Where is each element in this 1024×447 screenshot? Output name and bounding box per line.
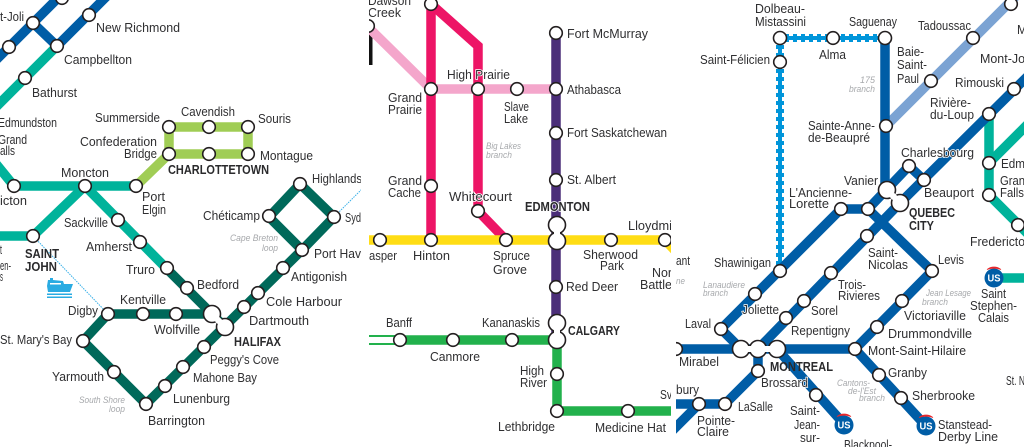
labels: Quebec: Derby Line bbox=[938, 430, 998, 444]
labels: Atlantic: en- bbox=[0, 259, 11, 273]
labels: Quebec: Saguenay bbox=[849, 15, 898, 29]
pink lines bbox=[431, 0, 506, 240]
labels: Atlantic: Montague bbox=[260, 149, 313, 163]
labels: Quebec: Victoriaville bbox=[904, 309, 966, 323]
labels: Quebec: Sherbrooke bbox=[912, 389, 975, 403]
double green end bbox=[369, 335, 395, 345]
branch notes: Quebec: 175 bbox=[860, 75, 876, 86]
Quebec and Montreal interchange fills bbox=[741, 190, 900, 349]
dotted Saguenay line bbox=[780, 38, 885, 270]
labels: Quebec: Dolbeau- bbox=[755, 2, 805, 16]
marker: Blackpool: US bbox=[838, 420, 851, 432]
labels: Quebec: Charlesbourg bbox=[901, 146, 974, 160]
blue network lines bbox=[670, 38, 1024, 433]
labels: Quebec: Stanstead- bbox=[938, 418, 992, 432]
marker: Saint Stephen bbox=[984, 267, 1004, 288]
branch note: Big Lakes: branch bbox=[486, 150, 512, 161]
labels: Atlantic: Syd bbox=[345, 211, 361, 225]
labels: Quebec: Saint-Félicien bbox=[700, 53, 770, 67]
labels: Atlantic: Bridge bbox=[124, 147, 157, 161]
labels: Quebec: Paul bbox=[897, 72, 919, 86]
labels: Quebec: Sorel bbox=[811, 304, 838, 318]
labels: Alberta: Prairie bbox=[388, 103, 422, 117]
labels: Alberta: Sherwood bbox=[583, 248, 638, 262]
labels: Atlantic: Cole Harbour bbox=[266, 295, 342, 309]
labels: Atlantic: alls bbox=[0, 144, 15, 158]
labels: Quebec: Rivieres bbox=[838, 289, 880, 303]
city labels: Quebec: CITY bbox=[909, 219, 935, 233]
dark green Nova Scotia loops bbox=[83, 184, 334, 404]
labels: Atlantic: s bbox=[0, 270, 3, 284]
labels: Alberta: Park bbox=[600, 259, 625, 273]
branch note: Big Lakes: Big Lakes bbox=[486, 141, 521, 152]
labels: Quebec: Mont-Saint-Hilaire bbox=[868, 344, 966, 358]
labels: Atlantic: Lunenburg bbox=[173, 392, 230, 406]
branch notes: Quebec bbox=[676, 75, 971, 404]
labels: Quebec: Rivière- bbox=[930, 96, 971, 110]
city labels: Alberta bbox=[525, 200, 621, 338]
labels: Atlantic: Sackville bbox=[64, 216, 108, 230]
labels: Quebec: du-Loup bbox=[930, 108, 974, 122]
branch notes: Quebec: branch bbox=[859, 393, 885, 404]
labels: Quebec: Laval bbox=[685, 317, 711, 331]
labels: Atlantic: Barrington bbox=[148, 414, 205, 428]
labels: Alberta: Banff bbox=[386, 316, 412, 330]
labels: Atlantic: Summerside bbox=[95, 111, 160, 125]
labels: Alberta bbox=[368, 0, 673, 435]
labels: Alberta: Grove bbox=[493, 263, 527, 277]
Edmonton and Calgary interchange fills bbox=[554, 232, 560, 333]
city labels: Atlantic: HALIFAX bbox=[234, 335, 282, 349]
green PEI loop bbox=[136, 127, 248, 186]
labels: Quebec bbox=[676, 2, 1024, 447]
labels: Quebec: Drummondville bbox=[888, 327, 972, 341]
ferry routes bbox=[33, 186, 365, 314]
labels: Atlantic: t bbox=[0, 243, 2, 257]
labels: Quebec: Levis bbox=[938, 253, 964, 267]
labels: Alberta: Cache bbox=[388, 186, 421, 200]
pale blue line bbox=[886, 0, 1024, 126]
labels: Alberta: Grand bbox=[388, 91, 422, 105]
branch notes: Quebec: Cantons- bbox=[837, 378, 870, 389]
branch notes: Quebec: branch bbox=[849, 84, 875, 95]
labels: Quebec: sur- bbox=[800, 431, 820, 445]
labels: Quebec: Saint bbox=[981, 287, 1006, 301]
labels: Alberta: Lake bbox=[504, 112, 528, 126]
labels: Quebec: Mirabel bbox=[679, 355, 719, 369]
labels: Alberta: Creek bbox=[368, 6, 402, 20]
icon: ferry bbox=[47, 278, 73, 298]
labels: Atlantic: Peggy's Cove bbox=[210, 353, 279, 367]
city labels: Quebec: QUEBEC bbox=[909, 206, 955, 220]
stations: Quebec bbox=[670, 0, 1024, 410]
green line bbox=[400, 340, 690, 411]
labels: Alberta: Lloydmi bbox=[628, 219, 672, 233]
teal New Brunswick lines bbox=[989, 114, 1024, 278]
city labels: Atlantic: CHARLOTTETOWN bbox=[168, 163, 269, 177]
panel: Atlantic Canada network bbox=[0, 0, 365, 428]
stations: Alberta bbox=[362, 0, 671, 417]
labels: Atlantic: Truro bbox=[126, 263, 155, 277]
labels: Atlantic: icton bbox=[0, 194, 27, 208]
marker: Saint Stephen: US bbox=[988, 274, 1001, 284]
branch notes: Atlantic: loop bbox=[109, 404, 125, 415]
labels: Atlantic: Highlands bbox=[312, 172, 362, 186]
city labels: Atlantic bbox=[25, 163, 282, 349]
labels: Quebec: Lorette bbox=[789, 197, 829, 211]
branch notes: Atlantic: loop bbox=[262, 243, 278, 254]
city labels: Quebec bbox=[770, 206, 955, 374]
city labels: Atlantic: JOHN bbox=[25, 260, 57, 274]
purple line bbox=[551, 33, 561, 335]
labels: Alberta: High bbox=[520, 364, 544, 378]
branch notes: Quebec: de-l'Est bbox=[848, 386, 876, 397]
labels: Atlantic: Moncton bbox=[61, 166, 109, 180]
labels: Atlantic: Yarmouth bbox=[52, 370, 104, 384]
labels: Quebec: Jean- bbox=[794, 418, 820, 432]
labels: Quebec: Tadoussac bbox=[918, 19, 971, 33]
labels: Alberta: Grand bbox=[388, 174, 422, 188]
labels: Quebec: Sainte-Anne- bbox=[808, 119, 875, 133]
branch notes: Quebec: ne bbox=[676, 276, 685, 287]
labels: Quebec: Granby bbox=[888, 366, 928, 380]
labels: Atlantic: Dartmouth bbox=[249, 314, 309, 328]
labels: Quebec: Joliette bbox=[742, 303, 779, 317]
labels: Alberta: Nor bbox=[652, 266, 672, 280]
teal New Brunswick lines bbox=[0, 46, 167, 269]
labels: Quebec: Repentigny bbox=[791, 324, 851, 338]
labels: Alberta: Canmore bbox=[430, 350, 480, 364]
labels: Atlantic: Bedford bbox=[197, 278, 239, 292]
labels: Atlantic: Digby bbox=[68, 304, 99, 318]
marker: Stanstead bbox=[916, 415, 936, 436]
labels: Atlantic: Campbellton bbox=[64, 53, 132, 67]
labels: Quebec: Beauport bbox=[924, 186, 975, 200]
labels: Atlantic: Bathurst bbox=[32, 86, 77, 100]
labels: Atlantic bbox=[0, 10, 362, 428]
labels: Quebec: Saint- bbox=[868, 246, 898, 260]
branch notes: Quebec: branch bbox=[703, 288, 728, 299]
branch notes: Quebec: branch bbox=[922, 297, 948, 308]
labels: Quebec: Saint- bbox=[897, 58, 927, 72]
branch note: Big Lakes bbox=[486, 142, 521, 158]
city labels: Alberta: EDMONTON bbox=[525, 200, 590, 214]
labels: Quebec: Claire bbox=[697, 425, 729, 439]
labels: Quebec: Mont-Jo bbox=[980, 52, 1024, 66]
city labels: Alberta: CALGARY bbox=[568, 324, 621, 338]
pale pink line bbox=[366, 25, 556, 89]
stations: Atlantic bbox=[3, 0, 340, 410]
labels: Alberta: Slave bbox=[504, 100, 529, 114]
branch notes: Quebec: Lanaudiere bbox=[703, 280, 745, 291]
marker: Blackpool bbox=[834, 414, 854, 434]
black line stub bbox=[369, 34, 372, 65]
labels: Quebec: Saint- bbox=[790, 404, 820, 418]
labels: Alberta: Medicine Hat bbox=[595, 421, 667, 435]
city labels: Quebec: MONTREAL bbox=[770, 360, 833, 374]
labels: Atlantic: Souris bbox=[258, 112, 291, 126]
labels: Quebec: ant bbox=[676, 254, 690, 268]
labels: Alberta: Hinton bbox=[413, 249, 450, 263]
labels: Atlantic: Confederation bbox=[80, 135, 157, 149]
yellow line bbox=[360, 240, 682, 258]
panel: Quebec network bbox=[670, 0, 1024, 447]
labels: Alberta: Fort Saskatchewan bbox=[567, 126, 667, 140]
city labels: Atlantic: SAINT bbox=[25, 247, 59, 261]
labels: Alberta: Kananaskis bbox=[482, 316, 540, 330]
panel: Alberta network bbox=[360, 0, 690, 435]
labels: Quebec: Pointe- bbox=[697, 414, 735, 428]
labels: Alberta: Athabasca bbox=[567, 83, 621, 97]
branch notes: Atlantic: Cape Breton bbox=[230, 233, 278, 244]
labels: Quebec: Trois- bbox=[838, 278, 866, 292]
labels: Alberta: St. Albert bbox=[567, 173, 616, 187]
branch notes: Atlantic bbox=[79, 233, 278, 415]
labels: Quebec: Rimouski bbox=[955, 76, 1004, 90]
labels: Quebec: Alma bbox=[819, 48, 846, 62]
labels: Quebec: Baie- bbox=[897, 45, 924, 59]
labels: Atlantic: Port bbox=[142, 190, 166, 204]
labels: Atlantic: t-Joli bbox=[0, 10, 24, 24]
labels: Atlantic: Edmundston bbox=[0, 116, 57, 130]
labels: Atlantic: Wolfville bbox=[154, 323, 200, 337]
labels: Atlantic: Elgin bbox=[142, 203, 166, 217]
labels: Alberta: asper bbox=[369, 249, 397, 263]
labels: Alberta: River bbox=[520, 376, 547, 390]
labels: Atlantic: Antigonish bbox=[291, 270, 347, 284]
labels: Atlantic: Kentville bbox=[120, 293, 166, 307]
labels: Quebec: bury bbox=[676, 383, 700, 397]
branch notes: Atlantic: South Shore bbox=[79, 395, 125, 406]
labels: Quebec: Nicolas bbox=[868, 258, 908, 272]
labels: Quebec: Calais bbox=[978, 311, 1009, 325]
labels: Atlantic: Cavendish bbox=[181, 105, 235, 119]
blue lines to Quebec bbox=[0, 0, 115, 66]
labels: Quebec: de-Beaupré bbox=[808, 131, 870, 145]
labels: Quebec: Mistassini bbox=[755, 15, 806, 29]
Halifax interchange fill bbox=[214, 316, 222, 324]
labels: Quebec: Brossard bbox=[761, 376, 808, 390]
labels: Alberta: Spruce bbox=[493, 249, 530, 263]
labels: Atlantic: Mahone Bay bbox=[193, 371, 258, 385]
labels: Atlantic: Port Hav bbox=[314, 247, 362, 261]
labels: Alberta: High Prairie bbox=[447, 68, 510, 82]
labels: Atlantic: St. Mary's Bay bbox=[0, 333, 73, 347]
labels: Atlantic: Chéticamp bbox=[203, 209, 260, 223]
labels: Alberta: Lethbridge bbox=[498, 420, 555, 434]
labels: Quebec: Shawinigan bbox=[714, 256, 771, 270]
labels: Quebec: Stephen- bbox=[970, 299, 1017, 313]
labels: Alberta: Fort McMurray bbox=[567, 27, 649, 41]
marker: Stanstead: US bbox=[920, 422, 933, 432]
US border markers bbox=[834, 267, 1004, 436]
labels: Alberta: Whitecourt bbox=[449, 190, 513, 204]
labels: Atlantic: New Richmond bbox=[96, 21, 180, 35]
labels: Quebec: L'Ancienne- bbox=[789, 186, 852, 200]
labels: Quebec: Vanier bbox=[844, 174, 878, 188]
labels: Alberta: Battle bbox=[640, 278, 672, 292]
branch notes: Quebec: Jean Lesage bbox=[925, 288, 971, 299]
labels: Alberta: Sv bbox=[660, 388, 673, 402]
labels: Alberta: Red Deer bbox=[566, 280, 618, 294]
labels: Atlantic: Amherst bbox=[86, 240, 133, 254]
labels: Quebec: LaSalle bbox=[738, 400, 773, 414]
